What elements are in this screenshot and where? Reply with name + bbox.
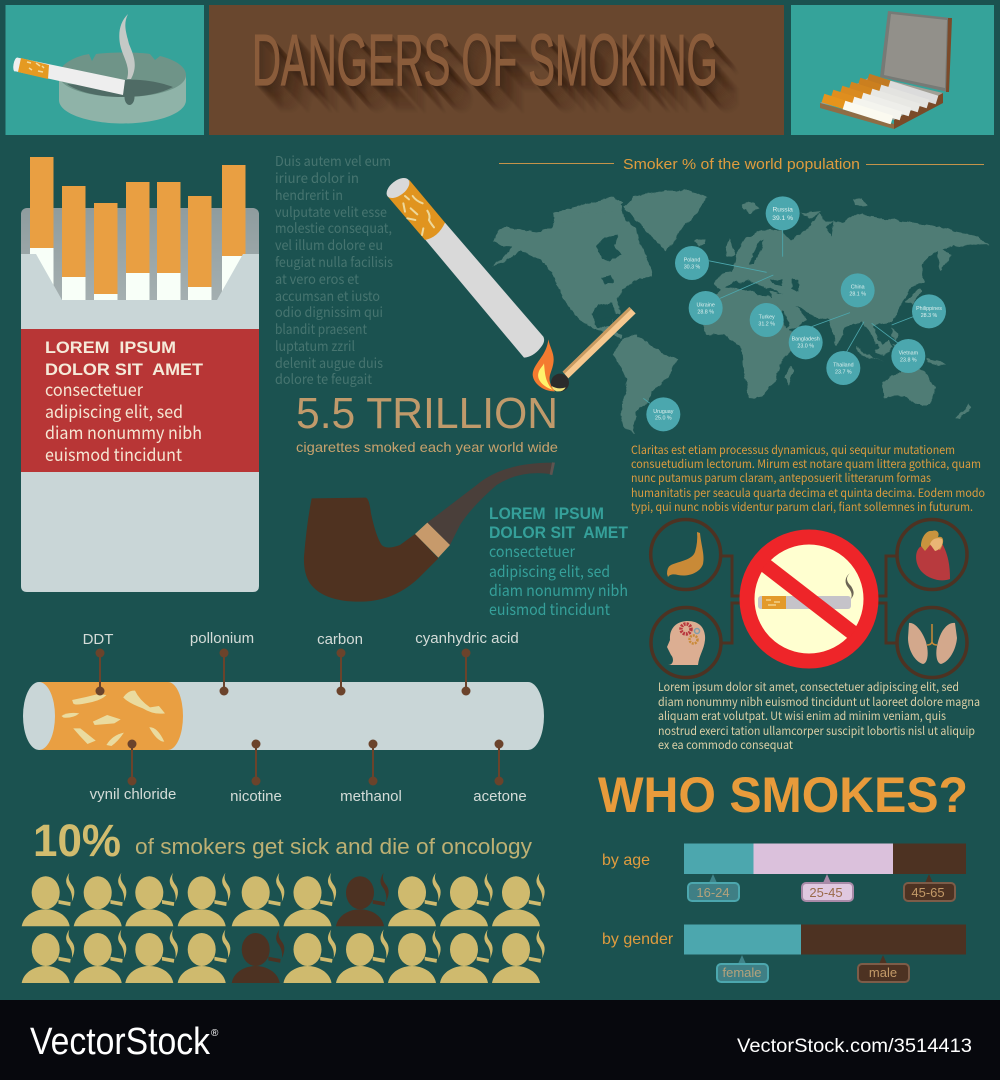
callout: Bangladesh: 23.0 % [797,344,814,350]
callout: Poland: 30.3 % [684,264,701,270]
callout: Uruguay: Uruguay [653,409,674,415]
text block: lorem paragraph: aliquam erat volutpat. Ut wisi enim ad minim veniam, quis [658,708,946,724]
text block: pipe caption: DOLOR SIT AMET [489,523,629,542]
statistic: 10 percent oncology [33,815,532,866]
callout: Philippines: Philippines [916,306,942,312]
red label: adipiscing elit, sed [45,398,183,423]
icon: pipe [304,462,555,602]
callout: Vietnam [891,339,925,373]
tag: female [717,955,768,982]
health effects diagram [651,520,967,678]
callout: Russia [766,196,800,230]
text block: dim lorem column: hendrerit in [275,184,343,204]
red label: DOLOR SIT AMET [45,360,204,379]
connector lines [722,556,896,643]
heading: who smokes: WHO SMOKES? [598,767,968,823]
callout: Vietnam: Vietnam [899,350,919,356]
tag: male: male [869,965,897,980]
tag: 16-24 [688,874,739,901]
callout: Ukraine [689,291,723,325]
callout: Bangladesh: Bangladesh [792,337,820,343]
text block: lorem paragraph [658,679,980,753]
chemical labels: vynil chloride [90,786,176,803]
icon: box lid [880,11,952,92]
text block: dim lorem column: molestie consequat, [275,217,392,237]
no smoking sign [747,537,871,661]
red label: diam nonummy nibh [45,419,202,444]
map landmasses [492,191,989,434]
map callouts [643,196,946,431]
sign cigarette [758,573,854,609]
text block: lorem paragraph: Lorem ipsum dolor sit amet, consectetuer adipiscing elit, sed [658,679,959,695]
tag: 25-45: 25-45 [809,885,843,900]
text block: dim lorem column: at vero eros et [275,268,359,288]
icon: smoke [119,14,135,79]
red label: euismod tincidunt [45,441,183,466]
tag: 45-65: 45-65 [911,885,945,900]
icon: ashtray [59,52,186,124]
footer: watermark bar [0,1000,1000,1080]
text block: dim lorem column: luptatum zzril [275,335,355,355]
title banner: DANGERS OF SMOKING [252,21,718,101]
callout: Thailand [826,351,860,385]
callout: Russia: 39.1 % [772,215,793,222]
text block: Claritas paragraph [631,442,985,515]
icon: ashtray cigarette [12,57,125,95]
statistic: 5.5 trillion: 5.5 TRILLION [296,389,558,438]
statistic: 5.5 trillion: cigarettes smoked each year world wide [296,439,558,455]
tag: female: female [722,965,762,980]
text block: Claritas paragraph: consuetudium lectorum. Mirum est notare quam littera gothica, quam [631,456,981,472]
panel: open cigarette box [791,5,994,135]
cigarette tube [23,682,544,750]
text block: lorem paragraph: nostrud exerci tation ullamcorper suscipit lobortis nisl ut aliquip [658,723,975,739]
red label: LOREM IPSUM [45,338,176,357]
panel: ashtray illustration [6,5,204,135]
callout: Turkey [750,303,784,337]
callout: China [841,273,875,307]
callout: China: 28.1 % [849,292,866,298]
icon: box tray [820,76,943,129]
chart: smokers by gender: by gender [602,931,674,948]
callout: Poland [675,246,709,280]
callout: Poland: Poland [684,257,700,263]
chart: smokers by age: by age [602,852,650,869]
callout: Thailand: Thailand [833,362,854,368]
text block: dim lorem column: feugiat nulla facilisis [275,251,393,271]
pack front [21,254,259,592]
chemical labels: carbon [317,631,363,648]
icon: lungs [897,608,967,678]
map heading: Smoker % of the world population [623,156,860,173]
chemical labels: DDT [83,631,113,648]
callout: Uruguay: 25.0 % [655,416,672,422]
chemical labels: methanol [340,788,402,805]
chemical markers [96,648,504,786]
icon: lit cigarette and match [383,174,636,392]
icon: brain and gears head [651,608,721,678]
match stick [551,307,636,392]
icon: cigarettes in box [823,78,937,120]
chart: smokers by gender [602,924,966,982]
callout: Ukraine: Ukraine [696,302,715,308]
callout: Bangladesh [789,325,823,359]
text block: Claritas paragraph: humanitatis per seacula quarta decima et quinta decima. Eodem modo [631,485,985,501]
statistic: 10 percent oncology: 10% [33,815,121,866]
red label: consectetuer [45,376,143,401]
text block: dim lorem column: iriure dolor in [275,167,359,187]
footer: watermark bar: VectorStock.com/3514413 [737,1035,972,1057]
text block: dim lorem column: blandit praesent [275,318,367,338]
text block: lorem paragraph: diam nonummy nibh euismod tincidunt ut laoreet dolore magna [658,694,980,710]
text block: Claritas paragraph: nunc putamus parum claram, anteposuerit litterarum formas [631,470,931,486]
icon: stomach [651,520,721,590]
red label [21,329,259,472]
match flame [533,339,555,391]
cigarettes in pack [30,157,246,309]
text block: dim lorem column: odio dignissim qui [275,301,383,321]
text block: dim lorem column: accumsan et iusto [275,285,380,305]
cigarette filter [383,174,445,240]
text block: pipe caption: adipiscing elit, sed [489,560,610,582]
pictogram: smokers rows [22,873,545,983]
panel: cigarette pack [21,157,259,592]
chemical labels: pollonium [190,630,254,647]
text block: dim lorem column: Duis autem vel eum [275,150,391,170]
callout: Turkey: Turkey [759,314,775,320]
text block: dim lorem column: vulputate velit esse [275,201,387,221]
tag: 25-45 [802,874,853,901]
pack back [21,208,259,308]
text block: pipe caption: euismod tincidunt [489,598,610,620]
title banner [209,5,784,135]
world map: smoker percentage [492,156,989,434]
footer: watermark bar: VectorStock [30,1021,211,1063]
tag: 45-65 [904,874,955,901]
text block: dim lorem column: delenit augue duis [275,352,383,372]
chemical labels [83,630,527,805]
chemical labels: cyanhydric acid [415,630,519,647]
text block: Claritas paragraph: typi, qui nunc nobis videntur parum clari, fiant sollemnes in futurum. [631,499,973,515]
text block: Claritas paragraph: Claritas est etiam processus dynamicus, qui sequitur mutationem [631,442,955,458]
text block: pipe caption: LOREM IPSUM [489,504,604,523]
statistic: 10 percent oncology: of smokers get sick and die of oncology [135,834,532,859]
text block: dim lorem column: vel illum dolore eu [275,234,383,254]
text block: pipe caption: diam nonummy nibh [489,579,628,601]
text block: pipe caption [489,504,629,620]
callout: Vietnam: 23.8 % [900,357,917,363]
chemical labels: nicotine [230,788,282,805]
footer: watermark bar: ® [211,1028,219,1039]
text block: pipe caption: consectetuer [489,540,576,562]
callout: Russia: Russia [772,207,793,214]
callout: Philippines [912,294,946,328]
chart: smokers by age [602,844,966,901]
tag: male [858,955,909,982]
chemical labels: acetone [473,788,527,805]
cigarette body [425,223,544,358]
icon: heart [897,520,967,590]
text block: dim lorem column [275,150,393,388]
callout: China: China [851,285,865,291]
callout: Ukraine: 28.8 % [697,309,714,315]
text block: dim lorem column: dolore te feugait [275,368,372,388]
tag: 16-24: 16-24 [696,885,730,900]
chart: cigarette chemicals [23,630,544,805]
callout: Thailand: 23.7 % [835,369,852,375]
text block: lorem paragraph: ex ea commodo consequat [658,737,794,753]
callout: Turkey: 31.2 % [758,321,775,327]
callout: Uruguay [646,397,680,431]
callout: Philippines: 28.3 % [921,313,938,319]
